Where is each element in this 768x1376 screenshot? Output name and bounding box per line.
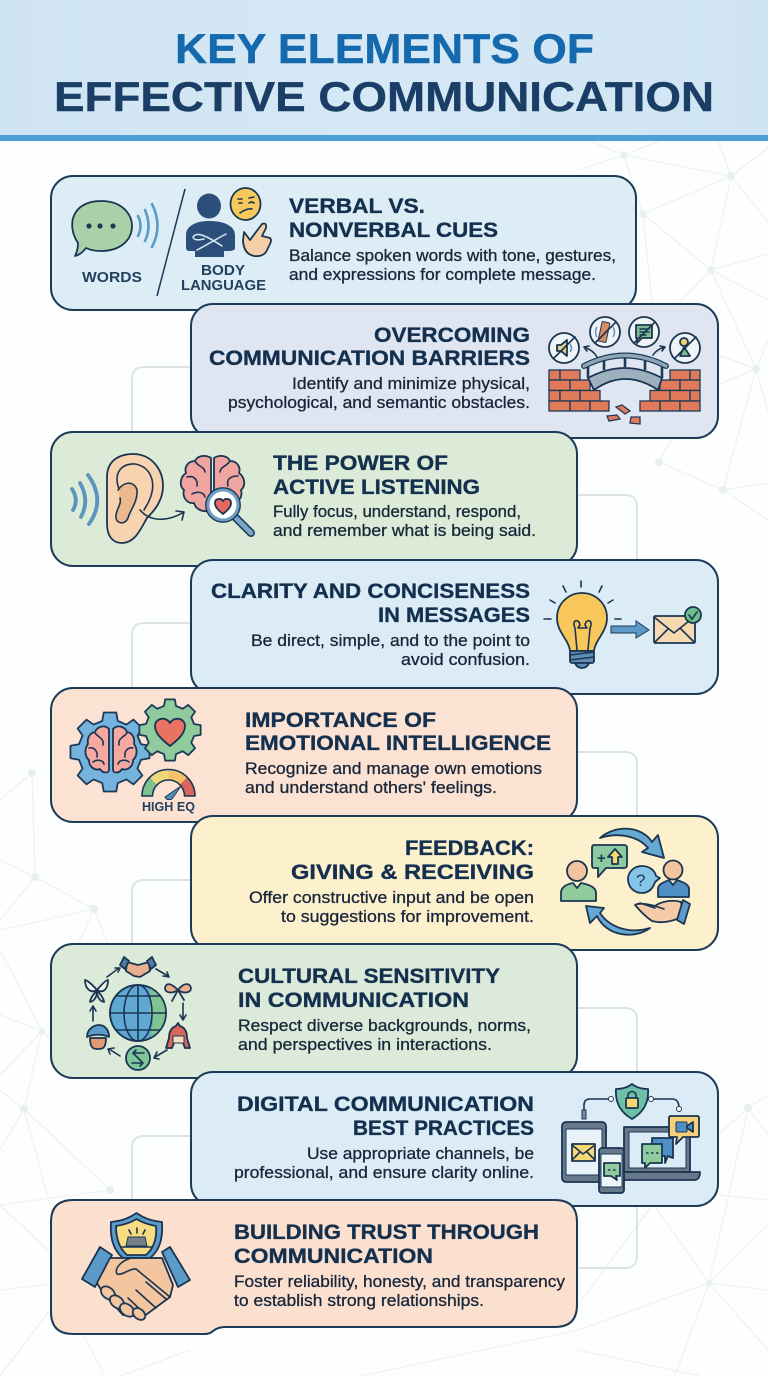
heading: DIGITAL COMMUNICATION	[237, 1093, 534, 1116]
icon: confused emoji	[230, 188, 260, 220]
body text	[245, 759, 542, 797]
icon: globe	[110, 985, 166, 1041]
heading	[237, 1093, 534, 1140]
icon: speech bubble with sound waves	[72, 201, 158, 256]
label: body language	[181, 263, 266, 294]
body text: Fully focus, understand, respond,	[273, 502, 521, 521]
icon: brain gear	[70, 712, 150, 792]
body text	[228, 374, 530, 412]
icon: heart gear	[139, 699, 201, 761]
body text: professional, and ensure clarity online.	[234, 1163, 534, 1182]
body text	[238, 1016, 531, 1054]
heading: CULTURAL SENSITIVITY	[238, 965, 500, 988]
icon: left person	[561, 861, 596, 901]
heading	[245, 709, 551, 755]
body text: Foster reliability, honesty, and transparency	[234, 1272, 565, 1291]
icon: person with crossed arms	[186, 194, 235, 257]
heading	[273, 452, 480, 499]
connector lines	[132, 367, 637, 1268]
heading	[211, 580, 530, 627]
icon: right person	[658, 860, 689, 897]
heading: IN MESSAGES	[378, 604, 530, 627]
body text: avoid confusion.	[401, 650, 530, 669]
icon: red hat	[166, 1023, 190, 1048]
heading: GIVING & RECEIVING	[291, 861, 534, 884]
heading	[289, 195, 498, 242]
speech bubble: question: ?	[636, 871, 645, 890]
icon: sound waves	[72, 475, 97, 524]
heading: IN COMMUNICATION	[238, 989, 469, 1012]
heading: EMOTIONAL INTELLIGENCE	[245, 732, 551, 755]
title: KEY ELEMENTS OF	[175, 25, 594, 72]
heading: IMPORTANCE OF	[245, 709, 436, 732]
heading: COMMUNICATION BARRIERS	[209, 347, 530, 370]
heading: CLARITY AND CONCISENESS	[211, 580, 530, 603]
body text: to establish strong relationships.	[234, 1291, 484, 1310]
arrow: top curved	[600, 829, 664, 858]
panel: emotional intelligence	[51, 688, 577, 822]
heading: COMMUNICATION	[234, 1245, 433, 1268]
body text	[249, 888, 534, 926]
label: words: WORDS	[82, 270, 142, 286]
icon: handshake	[82, 1247, 190, 1322]
icon: security shield with links	[582, 1084, 682, 1119]
body text: to suggestions for improvement.	[281, 907, 534, 926]
body text: Respect diverse backgrounds, norms,	[238, 1016, 531, 1035]
arrows: cultural cycle	[90, 968, 186, 1059]
body text	[234, 1272, 565, 1310]
heading: ACTIVE LISTENING	[273, 476, 480, 499]
heading	[234, 1221, 539, 1268]
body text: Identify and minimize physical,	[292, 374, 530, 393]
icon: open hand	[635, 900, 690, 924]
body text: Balance spoken words with tone, gestures,	[289, 246, 616, 265]
icon: barrier circles	[549, 317, 700, 363]
icon: pointing hand	[243, 224, 271, 256]
heading	[291, 837, 534, 884]
title	[54, 25, 714, 120]
body text	[273, 502, 536, 540]
icon: brain with magnifier	[181, 456, 251, 533]
icon: green swap circle	[126, 1046, 150, 1070]
heading: OVERCOMING	[374, 324, 530, 347]
icon: EQ gauge	[142, 770, 195, 800]
arrow: bulb to envelope	[611, 621, 649, 638]
label: body language: LANGUAGE	[181, 278, 266, 294]
icon: bow	[165, 984, 191, 1001]
icon: light bulb	[544, 581, 621, 668]
title: EFFECTIVE COMMUNICATION	[54, 73, 714, 120]
heading	[209, 324, 530, 370]
icon: person with turban	[87, 1025, 109, 1049]
body text	[251, 631, 530, 669]
panel: clarity and conciseness	[191, 560, 718, 694]
arrow: ear to brain	[140, 510, 184, 520]
heading: BUILDING TRUST THROUGH	[234, 1221, 539, 1244]
icon: envelope with check	[654, 607, 701, 643]
body text: and perspectives in interactions.	[238, 1035, 492, 1054]
heading: FEEDBACK:	[405, 837, 534, 860]
body text	[289, 246, 616, 284]
panel: cultural sensitivity	[51, 944, 577, 1078]
icon: laptop	[620, 1116, 700, 1180]
arrow: bottom curved	[586, 906, 650, 935]
body text: Be direct, simple, and to the point to	[251, 631, 530, 650]
icon: feedback exchange	[561, 829, 690, 935]
chat bubbles	[642, 1138, 673, 1168]
heading: VERBAL VS.	[289, 195, 425, 218]
panel: overcoming communication barriers	[191, 304, 718, 438]
panel: building trust	[51, 1200, 577, 1334]
divider slash	[157, 189, 185, 296]
heading: THE POWER OF	[273, 452, 448, 475]
body text: Use appropriate channels, be	[307, 1144, 534, 1163]
body text: Offer constructive input and be open	[249, 888, 534, 907]
heading	[238, 965, 500, 1012]
body text: and expressions for complete message.	[289, 265, 596, 284]
panel: feedback	[191, 816, 718, 950]
label: high EQ: HIGH EQ	[142, 799, 195, 814]
body text	[234, 1144, 534, 1182]
video call bubble	[669, 1116, 699, 1144]
label: body language: BODY	[201, 263, 245, 279]
icon: phone	[599, 1148, 624, 1193]
icon: butterfly	[85, 980, 108, 1002]
panel: active listening	[51, 432, 577, 566]
body text: and remember what is being said.	[273, 521, 536, 540]
panel: digital communication	[191, 1072, 718, 1206]
icon: tablet	[562, 1122, 606, 1182]
body text: Recognize and manage own emotions	[245, 759, 542, 778]
body text: and understand others' feelings.	[245, 778, 497, 797]
icon: handshake	[120, 957, 156, 977]
speech bubble: suggestion: +	[597, 850, 606, 867]
panel: verbal vs nonverbal cues	[51, 176, 636, 310]
heading: NONVERBAL CUES	[289, 219, 498, 242]
icon: bridge over broken wall	[549, 346, 700, 424]
header band	[0, 0, 768, 141]
body text: psychological, and semantic obstacles.	[228, 393, 530, 412]
icon: shield with bell	[111, 1213, 162, 1258]
icon: ear	[107, 454, 163, 543]
heading: BEST PRACTICES	[353, 1117, 534, 1140]
